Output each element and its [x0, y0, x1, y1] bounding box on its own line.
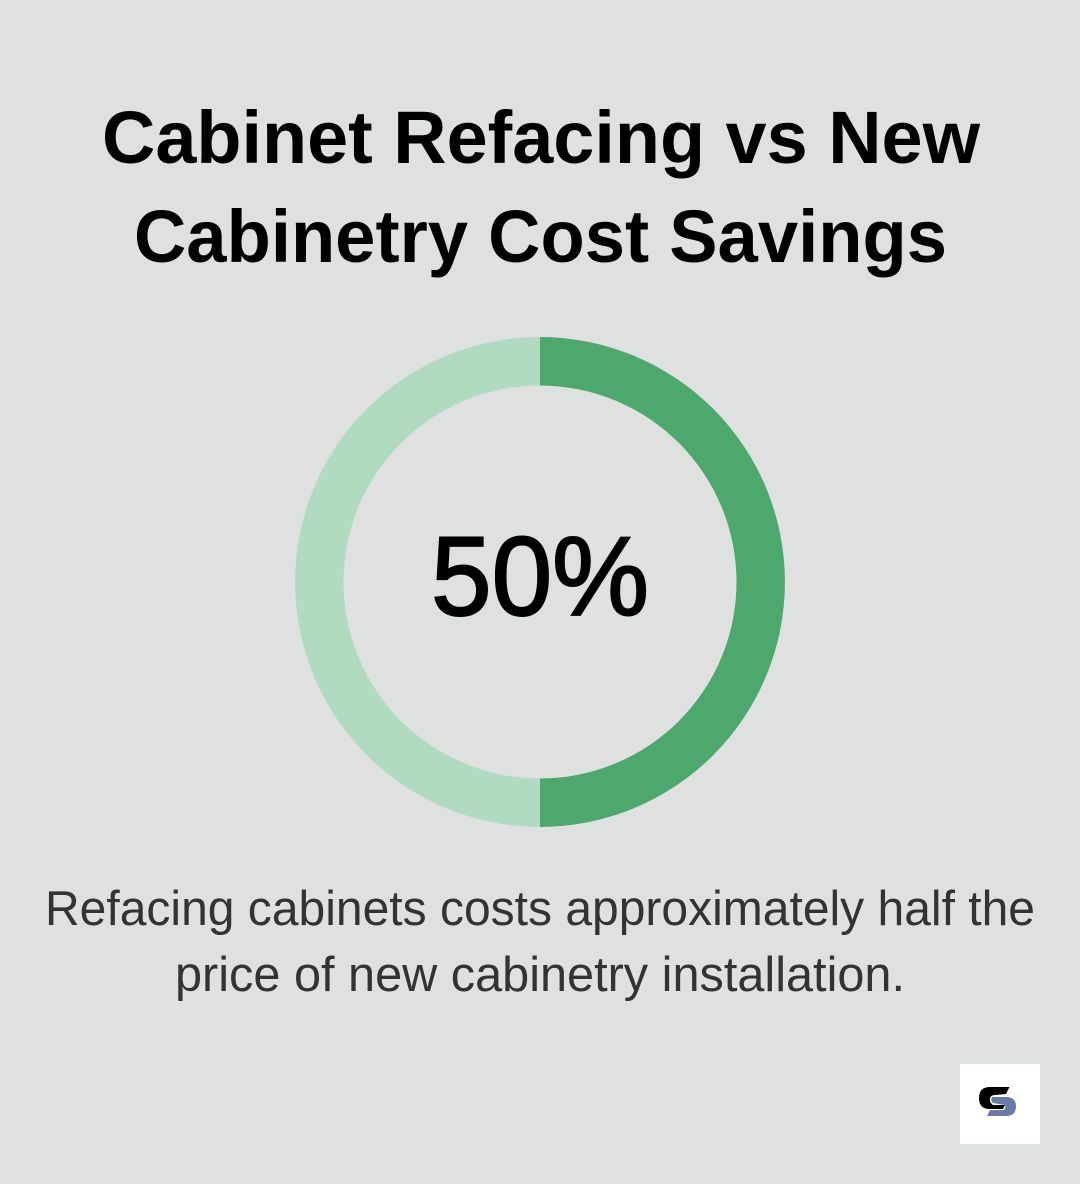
title: Cabinetry Cost Savings: [134, 195, 947, 278]
description text: [45, 882, 1035, 1002]
logo badge: [960, 1064, 1040, 1144]
logo mark: blue part: [987, 1097, 1016, 1116]
donut segment: 50% savings: [540, 337, 785, 827]
donut chart: 50%: [295, 337, 785, 827]
description text: Refacing cabinets costs approximately half the: [45, 882, 1035, 936]
donut value: 50%: [431, 514, 649, 639]
description text: price of new cabinetry installation.: [175, 948, 905, 1002]
logo mark: black part: [979, 1087, 1010, 1109]
title: Cabinet Refacing vs New: [102, 96, 980, 179]
title: [102, 96, 980, 278]
donut segment: remaining half: [295, 337, 540, 827]
